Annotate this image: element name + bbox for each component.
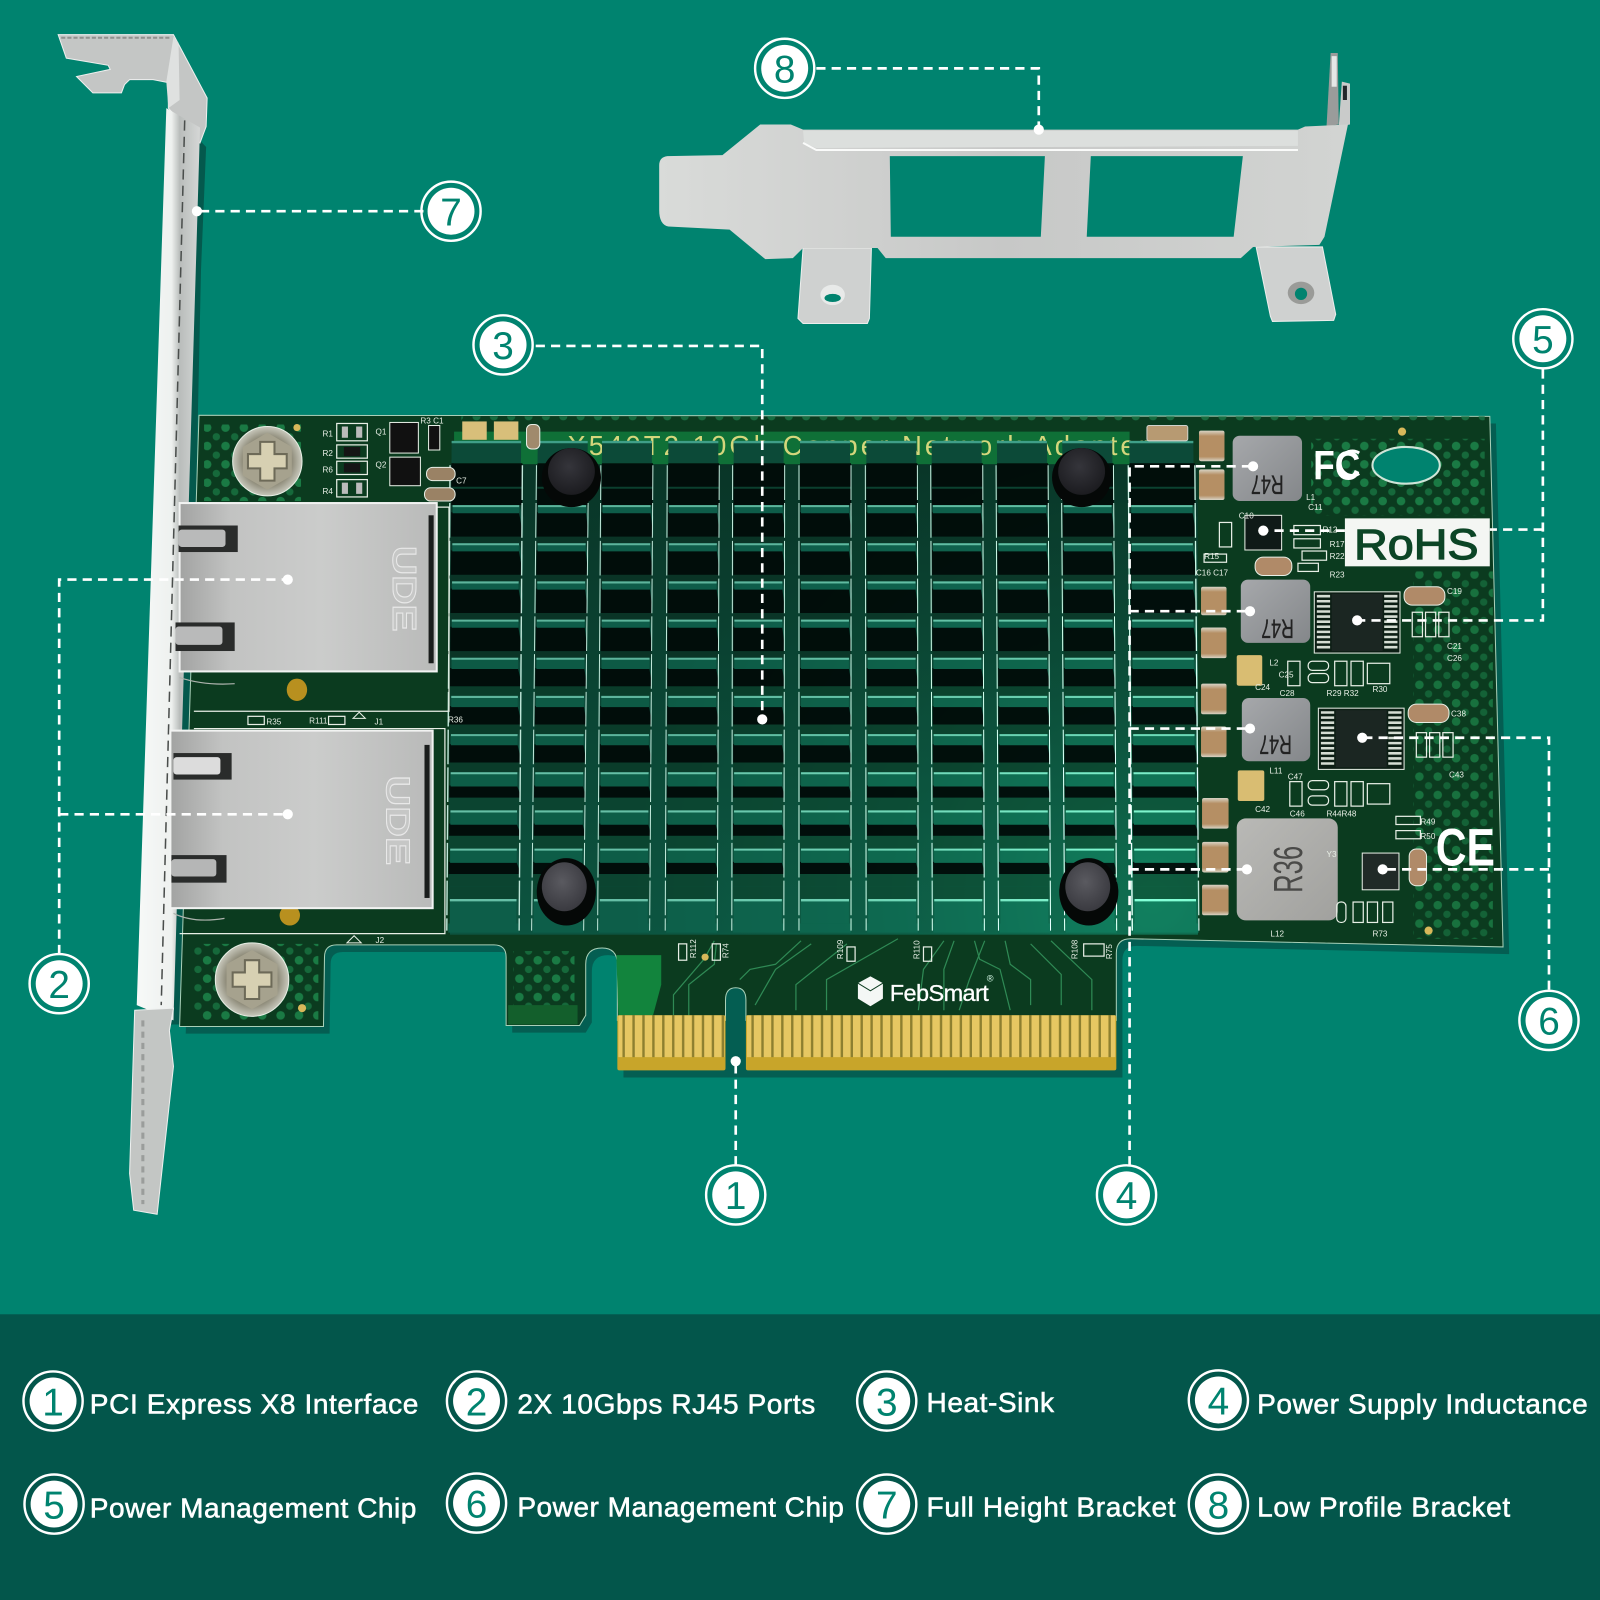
callout 5	[1513, 309, 1572, 368]
small resistors and labels: R30	[1372, 685, 1388, 694]
legend item 6: 6	[466, 1483, 487, 1526]
legend item 3: 3	[876, 1381, 898, 1424]
CE mark: CE	[1436, 818, 1495, 877]
PCIe labels: R110	[912, 940, 921, 959]
low profile bracket	[659, 53, 1350, 323]
top left components: R2	[322, 449, 333, 458]
legend item 3: Heat-Sink	[927, 1387, 1055, 1418]
top left components: R4	[322, 487, 333, 496]
small resistors and labels: C25	[1279, 671, 1294, 680]
small resistors and labels: R15	[1204, 552, 1220, 561]
leader 7	[192, 206, 423, 216]
legend item 1	[23, 1371, 418, 1431]
small resistors and labels: C21	[1447, 642, 1462, 651]
small resistors and labels: L12	[1270, 930, 1284, 939]
port area silkscreen: R35	[266, 717, 282, 726]
leader 8	[816, 68, 1044, 135]
PCIe labels	[679, 939, 1114, 961]
legend item 8: 8	[1208, 1484, 1229, 1527]
legend item 6: Power Management Chip	[517, 1491, 844, 1522]
FebSmart logo: ®	[987, 974, 994, 984]
callout 3: 3	[492, 325, 514, 368]
capacitors	[1147, 426, 1449, 915]
small resistors and labels: C38	[1451, 709, 1466, 718]
callout 7: 7	[440, 192, 462, 235]
power inductors	[1233, 436, 1338, 920]
callout 3	[473, 315, 533, 374]
RJ45 port 1	[176, 503, 437, 671]
callout 2	[30, 954, 89, 1013]
small resistors and labels: C43	[1449, 771, 1464, 780]
small resistors and labels: C16 C17	[1196, 569, 1229, 578]
port area silkscreen: J2	[376, 936, 385, 945]
board title silkscreen: X540T2 10Gb Copper Network Adapter	[567, 430, 1148, 461]
legend item 2	[447, 1371, 815, 1431]
callout 6	[1519, 991, 1579, 1050]
PCIe labels: R108	[1071, 939, 1080, 959]
small resistors and labels: C11	[1308, 503, 1323, 512]
leader 1	[731, 1056, 741, 1165]
small resistors and labels: C42	[1255, 805, 1271, 814]
small resistors and labels: C26	[1447, 654, 1462, 663]
small resistors and labels: Y3	[1327, 850, 1337, 859]
small resistors and labels: R22	[1330, 552, 1345, 561]
heat-sink	[447, 441, 1200, 935]
legend item 2: 2	[466, 1381, 487, 1424]
FebSmart logo	[857, 974, 994, 1007]
legend item 5	[24, 1474, 416, 1534]
callout 1: 1	[725, 1175, 746, 1218]
network card PCB	[180, 415, 1503, 1027]
legend item 5: 5	[43, 1484, 65, 1527]
port area silkscreen: R36	[448, 715, 463, 724]
RJ45 port 2: UDE	[379, 776, 416, 865]
small resistors and labels: R23	[1330, 571, 1345, 580]
small resistors and labels: C24	[1255, 683, 1271, 692]
FebSmart logo: FebSmart	[890, 980, 989, 1006]
legend item 1: PCI Express X8 Interface	[90, 1388, 418, 1419]
legend item 7	[857, 1474, 1176, 1534]
legend item 2: 2X 10Gbps RJ45 Ports	[517, 1388, 815, 1419]
top left components: Q2	[376, 460, 387, 469]
leader 6	[1357, 733, 1549, 990]
legend item 4: Power Supply Inductance	[1257, 1388, 1588, 1419]
PCIe labels: R109	[836, 939, 845, 959]
top left components: C7	[456, 477, 467, 486]
top left components	[293, 416, 540, 501]
FC mark: FC	[1313, 443, 1360, 489]
small resistors and labels: C47	[1288, 773, 1303, 782]
RoHS mark: RoHS	[1354, 521, 1479, 569]
PCB via dots	[194, 416, 1493, 1024]
legend item 6	[447, 1473, 844, 1533]
full height bracket	[58, 35, 207, 1214]
legend band	[0, 1314, 1600, 1600]
power inductors: R47	[1251, 470, 1284, 500]
small resistors and labels: L11	[1269, 766, 1283, 775]
port area silkscreen: R111	[309, 716, 328, 725]
standoff pins	[537, 448, 1118, 926]
mounting slot	[1372, 447, 1440, 484]
callout 2: 2	[48, 964, 70, 1007]
regulator chips	[1245, 515, 1404, 890]
leader 3	[536, 346, 767, 724]
legend item 4	[1189, 1370, 1588, 1430]
RJ45 port 2	[170, 731, 433, 908]
small resistors and labels: R73	[1372, 930, 1388, 939]
small resistors and labels: R12	[1322, 526, 1338, 535]
small resistors and labels: R29 R32	[1327, 689, 1359, 698]
small resistors and labels: C19	[1447, 587, 1462, 596]
top left components: R1	[322, 430, 333, 439]
legend item 8: Low Profile Bracket	[1257, 1491, 1510, 1522]
callout 8: 8	[774, 49, 795, 92]
top left components: R6	[322, 465, 333, 474]
small resistors and labels: R17	[1330, 540, 1345, 549]
port area silkscreen	[173, 507, 463, 945]
mounting screw top	[233, 427, 302, 496]
power inductors: R36	[1265, 846, 1311, 893]
legend item 8	[1189, 1474, 1510, 1534]
small resistors and labels: R50	[1420, 832, 1436, 841]
callout 7	[421, 182, 481, 241]
PCIe labels: R75	[1105, 944, 1114, 959]
leader 5	[1258, 369, 1543, 626]
legend item 5: Power Management Chip	[90, 1492, 416, 1523]
power inductors: R47	[1261, 613, 1294, 643]
small resistors and labels: L2	[1269, 658, 1279, 667]
legend item 1: 1	[42, 1381, 64, 1424]
legend item 3	[857, 1371, 1055, 1431]
small resistors and labels: R44R48	[1327, 809, 1357, 818]
PCIe labels: R74	[722, 943, 731, 958]
small resistors and labels: C10	[1239, 511, 1254, 520]
gold edge fingers	[617, 1015, 1116, 1070]
PCB shadow	[186, 422, 1509, 1078]
port area silkscreen: J1	[374, 717, 384, 726]
small resistors and labels: R49	[1420, 817, 1436, 826]
small resistors and labels	[1196, 428, 1466, 939]
legend item 7: Full Height Bracket	[927, 1491, 1176, 1522]
top left components: R3 C1	[420, 416, 444, 425]
leader 4	[1130, 461, 1258, 1165]
mounting screw bottom	[215, 943, 306, 1016]
PCIe traces	[673, 939, 1092, 1015]
small resistors and labels: L1	[1306, 493, 1316, 502]
top left components: Q1	[376, 428, 387, 437]
callout 4	[1097, 1165, 1156, 1224]
legend item 7: 7	[876, 1484, 898, 1527]
legend item 4: 4	[1208, 1380, 1229, 1423]
callout 5: 5	[1532, 319, 1554, 362]
callout 6: 6	[1538, 1001, 1560, 1044]
small resistors and labels: C28	[1280, 689, 1295, 698]
callout 4: 4	[1116, 1175, 1137, 1218]
RJ45 port 1: UDE	[385, 546, 422, 632]
power inductors: R47	[1259, 730, 1292, 760]
leader 2	[59, 574, 293, 954]
small resistors and labels: C46	[1290, 809, 1305, 818]
PCIe labels: R112	[689, 939, 698, 958]
callout 8	[755, 39, 814, 98]
callout 1	[706, 1165, 765, 1224]
